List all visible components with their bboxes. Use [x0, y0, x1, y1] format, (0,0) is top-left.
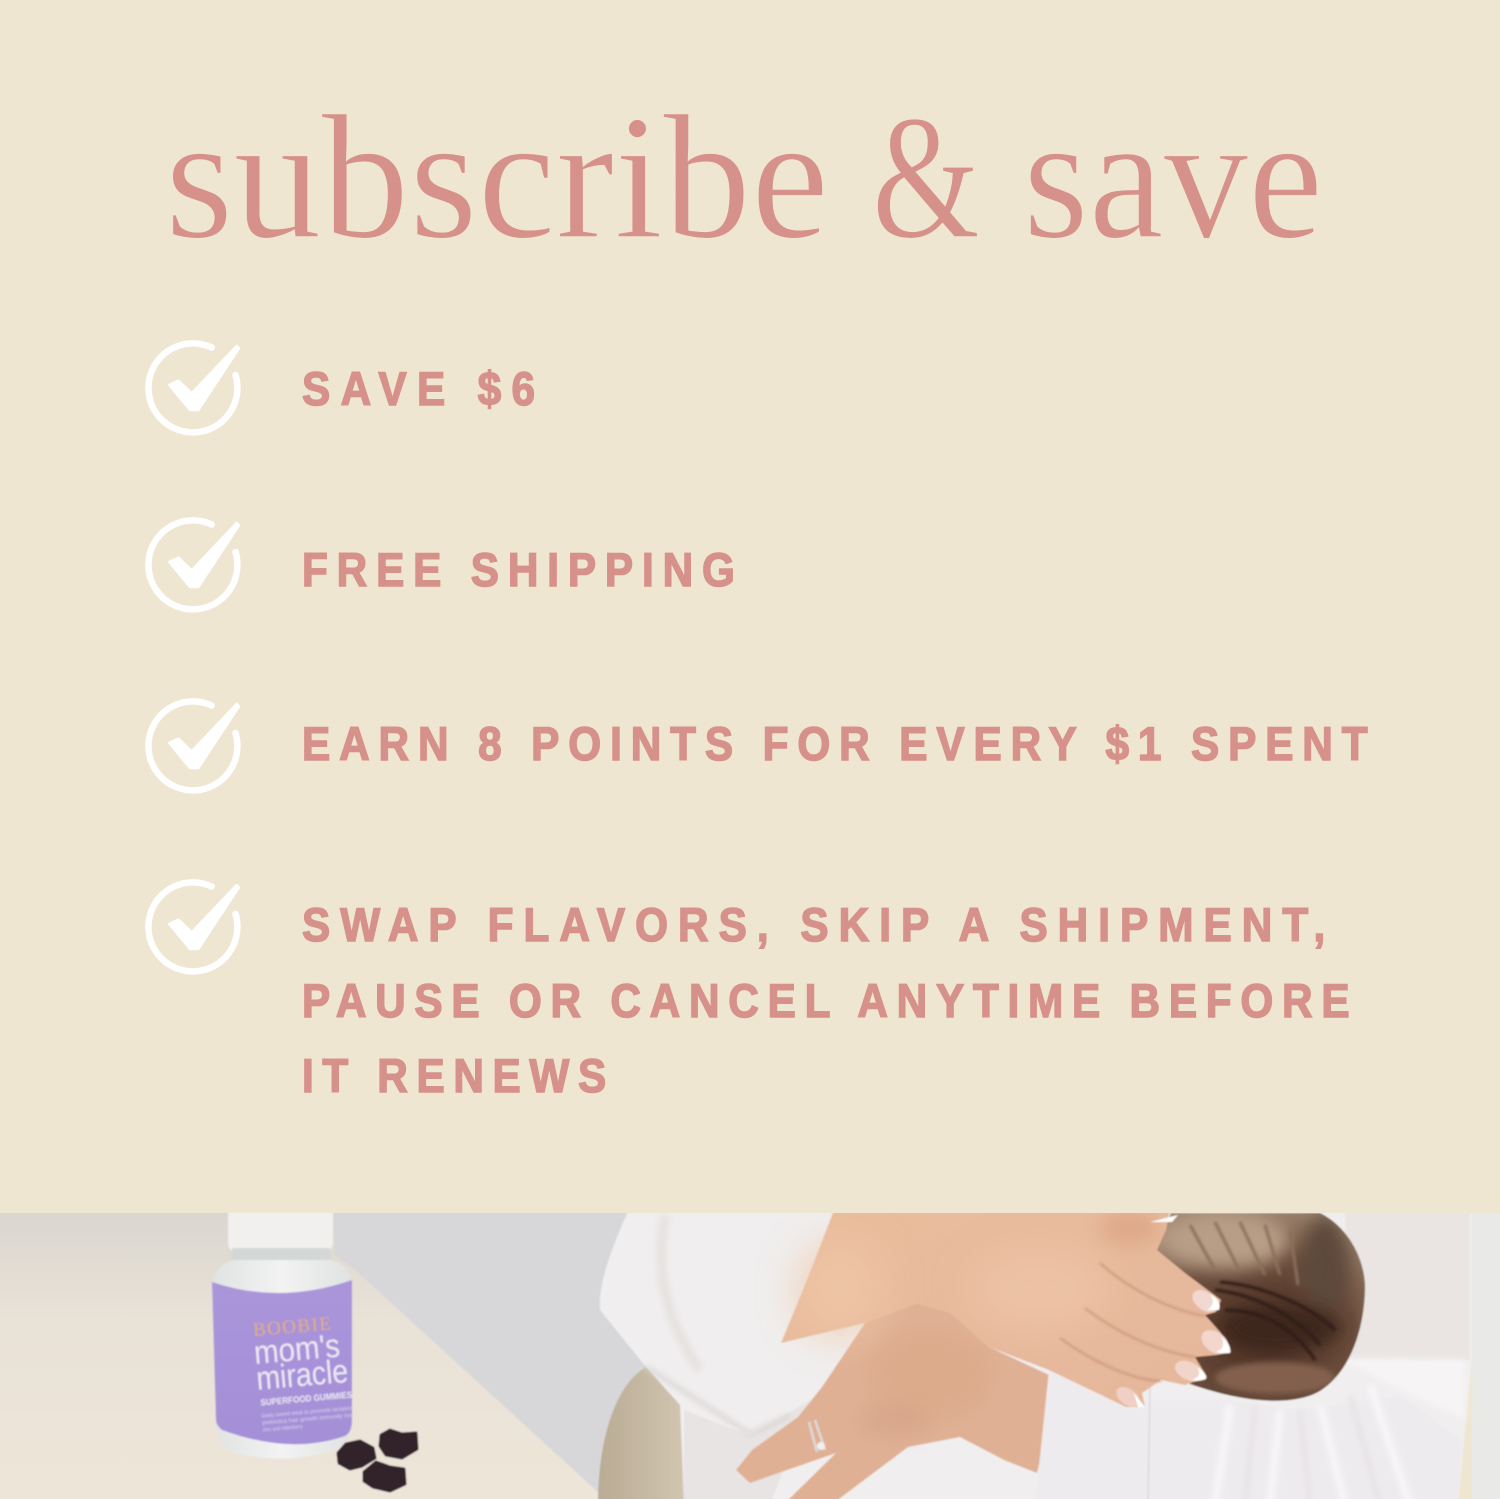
fingernails [1113, 1215, 1233, 1411]
label text: prebiotics hair growth immunity iron [262, 1413, 354, 1427]
title [165, 78, 1323, 276]
wall [336, 1213, 646, 1492]
label: EARN 8 POINTS FOR EVERY $1 SPENT [302, 719, 1368, 771]
title: subscribe [165, 78, 829, 276]
label text: SUPERFOOD GUMMIES [260, 1390, 353, 1408]
label text: BOOBIE [252, 1313, 332, 1341]
benefit: flexible subscription [148, 882, 1350, 1103]
stool [598, 1367, 690, 1499]
title: & [872, 78, 980, 276]
benefit: free shipping [148, 520, 735, 609]
label: IT RENEWS [302, 1051, 606, 1103]
label text: miracle [255, 1352, 350, 1397]
title: save [1023, 78, 1323, 276]
bottle [212, 1205, 355, 1459]
label: SAVE $6 [302, 364, 535, 416]
label text: Daily sweet treat to promote lactation [261, 1406, 354, 1420]
label text: mom's [252, 1327, 341, 1371]
baby head [1156, 1213, 1366, 1402]
upper hand and arm [781, 1205, 1233, 1411]
cuff [1038, 1358, 1402, 1499]
label text: zinc and elderberry [263, 1424, 303, 1434]
shirt [600, 1205, 1500, 1499]
label [302, 900, 1350, 1103]
lower hand with ring [736, 1303, 1060, 1499]
icon: check circle [148, 520, 239, 609]
benefit: save $6 [148, 343, 535, 432]
label: FREE SHIPPING [302, 545, 735, 597]
cap [228, 1213, 334, 1250]
label [212, 1280, 352, 1444]
label: PAUSE OR CANCEL ANYTIME BEFORE [302, 976, 1350, 1028]
icon: check circle [148, 882, 239, 971]
photo: product and mother holding baby [0, 1205, 1500, 1499]
benefit: earn points [148, 701, 1368, 790]
label text [251, 1312, 355, 1434]
ring [809, 1420, 825, 1452]
icon: check circle [148, 701, 239, 790]
label: SWAP FLAVORS, SKIP A SHIPMENT, [302, 900, 1325, 952]
icon: check circle [148, 343, 239, 432]
body [213, 1260, 352, 1459]
gummies [338, 1430, 417, 1491]
table top [0, 1213, 420, 1494]
